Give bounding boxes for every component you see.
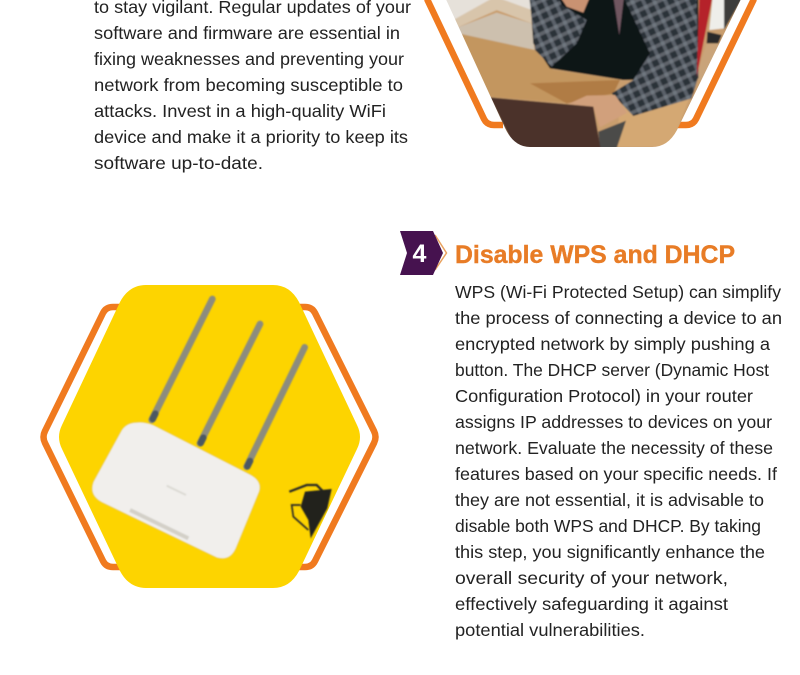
text block: step 4 description: the process of connecting a device to an xyxy=(455,308,782,328)
text block: step 4 description: this step, you significantly enhance the xyxy=(455,542,765,562)
panel: step 3 continued text: fixing weaknesses and preventing your xyxy=(94,49,404,69)
photo: white router on yellow background xyxy=(59,285,360,588)
panel: step 3 continued text: attacks. Invest in a high-quality WiFi xyxy=(94,101,386,121)
text block: step 4 description xyxy=(455,282,782,640)
panel: step 3 continued text: software and firmware are essential in xyxy=(94,23,400,43)
icon: step number 4 badge xyxy=(400,231,446,275)
text block: step 4 description: assigns IP addresses to devices on your xyxy=(455,412,772,432)
illustration: router with antennas and power adapter xyxy=(92,299,332,559)
heading: Disable WPS and DHCP: Disable WPS and DHCP xyxy=(455,241,735,269)
text block: step 4 description: disable both WPS and DHCP. By taking xyxy=(455,516,761,536)
text block: step 4 description: button. The DHCP server (Dynamic Host xyxy=(455,360,769,380)
icon: step number 4 badge: 4 xyxy=(413,240,427,268)
text block: step 4 description: effectively safeguarding it against xyxy=(455,594,728,614)
text block: step 4 description: potential vulnerabilities. xyxy=(455,620,645,640)
text block: step 4 description: encrypted network by simply pushing a xyxy=(455,334,770,354)
photo: person working on a laptop xyxy=(446,0,740,147)
text block: step 4 description: they are not essential, it is advisable to xyxy=(455,490,764,510)
panel: step 3 continued text: software up-to-date. xyxy=(94,153,263,173)
icon: orange hexagon frame behind laptop photo xyxy=(427,0,754,125)
text block: step 4 description: WPS (Wi-Fi Protected Setup) can simplify xyxy=(455,282,781,302)
panel: step 3 continued text: network from becoming susceptible to xyxy=(94,75,403,95)
text block: step 4 description: Configuration Protocol) in your router xyxy=(455,386,753,406)
icon: orange hexagon frame behind router photo xyxy=(44,307,376,567)
text block: step 4 description: features based on your specific needs. If xyxy=(455,464,777,484)
panel: step 3 continued text: device and make it a priority to keep its xyxy=(94,127,408,147)
panel: step 3 continued text xyxy=(94,0,411,173)
text block: step 4 description: network. Evaluate the necessity of these xyxy=(455,438,773,458)
text block: step 4 description: overall security of your network, xyxy=(455,568,728,588)
shape: yellow hexagon background xyxy=(59,285,360,588)
